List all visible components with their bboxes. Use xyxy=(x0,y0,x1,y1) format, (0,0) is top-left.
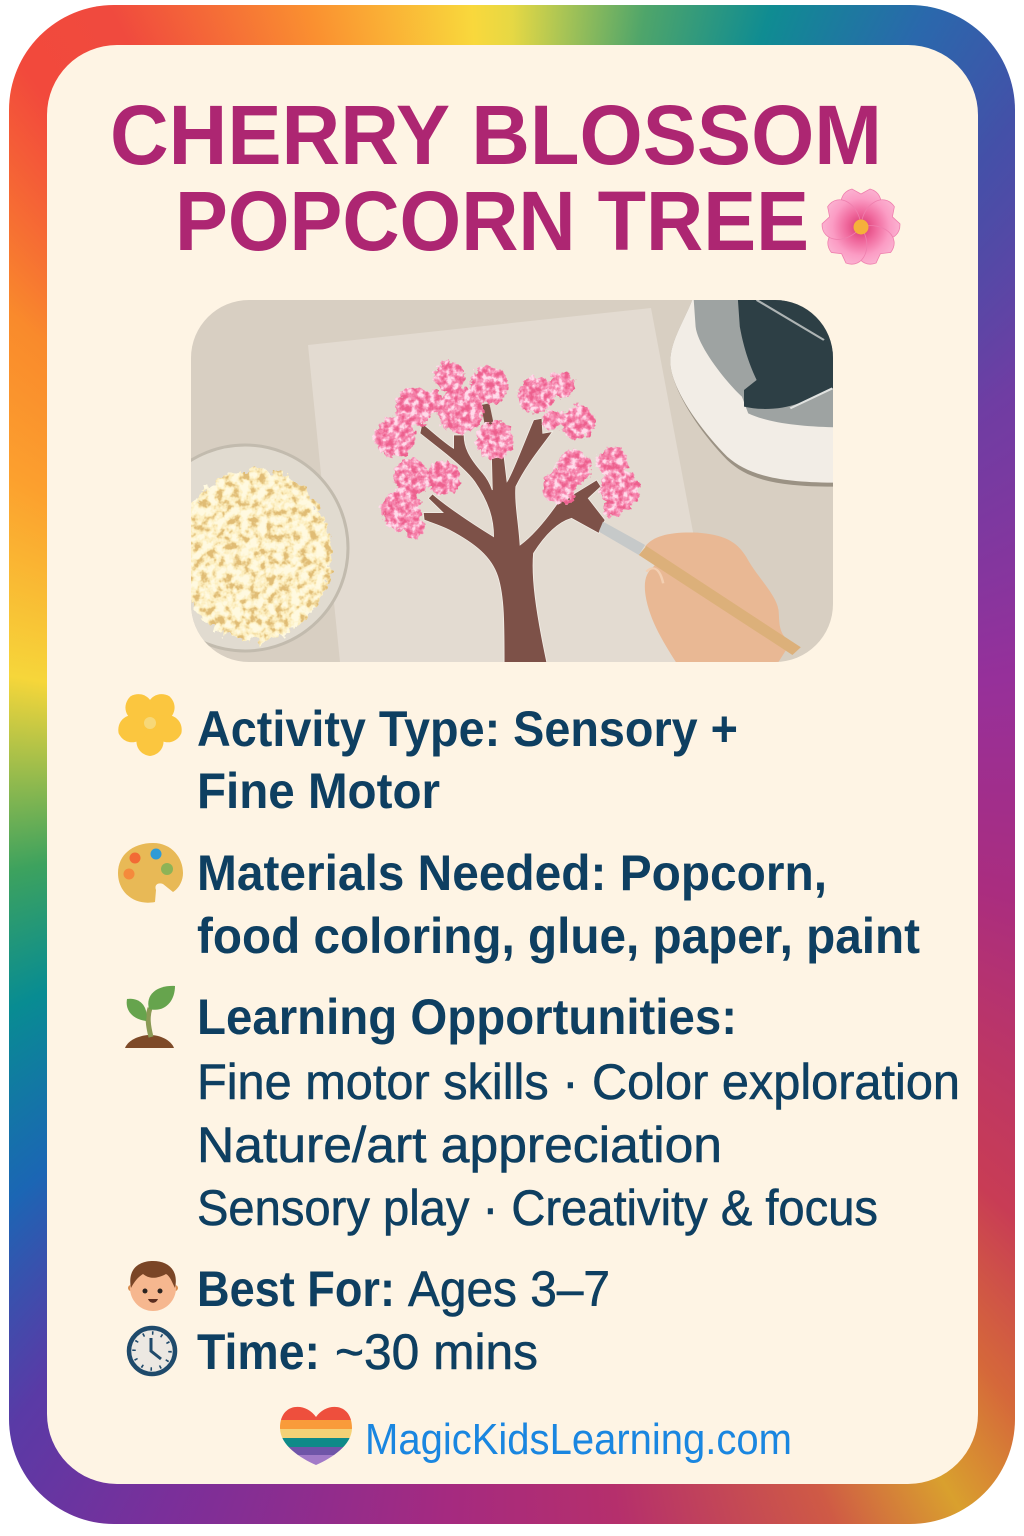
card content xyxy=(113,105,958,1465)
materials needed text xyxy=(197,845,920,964)
website footer: MagicKidsLearning.com xyxy=(365,1415,792,1464)
hand holding brush xyxy=(599,522,801,663)
icon: yellow flower xyxy=(114,688,186,756)
title: POPCORN TREE xyxy=(175,174,809,268)
best for text xyxy=(197,1261,610,1317)
stand mixer xyxy=(670,297,837,487)
title: CHERRY BLOSSOM xyxy=(110,88,882,182)
time text: Time: xyxy=(197,1324,320,1380)
sheet of paper xyxy=(308,308,714,662)
tree trunk xyxy=(420,403,605,663)
icon: paint palette xyxy=(118,843,183,903)
learning opportunities text: Learning Opportunities: xyxy=(197,989,737,1045)
learning opportunities text xyxy=(197,989,960,1236)
learning opportunities text: Nature/art appreciation xyxy=(197,1117,722,1173)
best for text: Ages 3–7 xyxy=(408,1261,610,1317)
icon: seedling xyxy=(125,986,175,1048)
icon: child face xyxy=(128,1261,178,1311)
icon: rainbow heart xyxy=(280,1406,352,1465)
icon: clock xyxy=(129,1328,175,1374)
time text xyxy=(197,1324,538,1380)
glass bowl xyxy=(191,444,350,652)
photo: popcorn tree craft xyxy=(142,297,837,663)
learning opportunities text: Fine motor skills · Color exploration xyxy=(197,1054,960,1110)
learning opportunities text: Sensory play · Creativity & focus xyxy=(197,1180,878,1236)
photo tabletop xyxy=(191,300,833,662)
activity type text: Activity Type: Sensory + xyxy=(197,701,738,757)
materials needed text: food coloring, glue, paper, paint xyxy=(197,908,920,964)
activity type text xyxy=(197,701,738,819)
icon: cherry blossom xyxy=(819,189,903,269)
title xyxy=(110,88,882,268)
materials needed text: Materials Needed: Popcorn, xyxy=(197,845,827,901)
time text: ~30 mins xyxy=(335,1324,538,1380)
best for text: Best For: xyxy=(197,1261,395,1317)
pink popcorn blossoms xyxy=(375,362,640,538)
popcorn xyxy=(179,469,331,641)
activity type text: Fine Motor xyxy=(197,763,440,819)
